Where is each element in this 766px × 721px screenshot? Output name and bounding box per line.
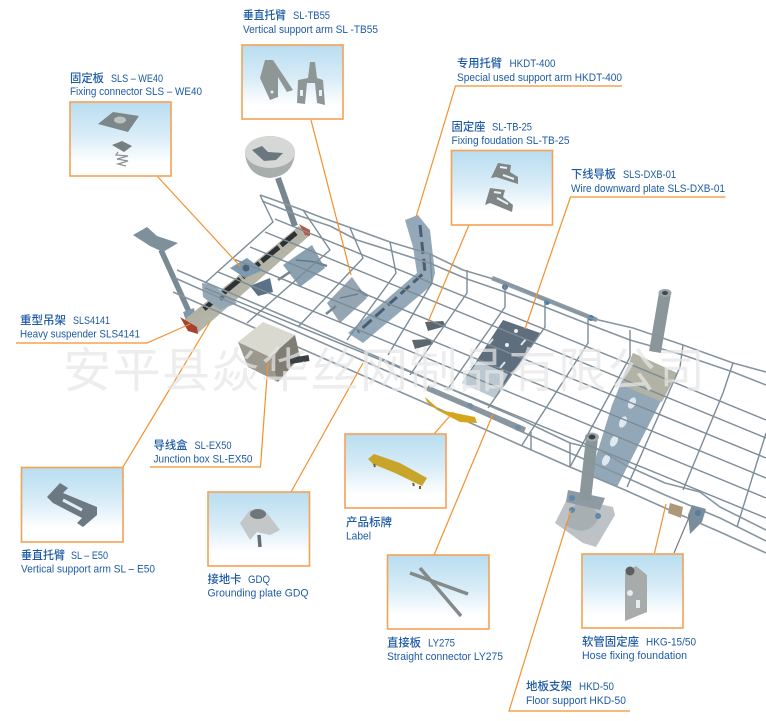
label: vertical support arm TB55: Vertical support arm SL -TB55 xyxy=(243,24,378,36)
label: straight connector: 直接板 xyxy=(387,636,421,650)
label: vertical support arm E50: Vertical support arm SL – E50 xyxy=(21,564,155,576)
leader line: label xyxy=(434,412,454,434)
leader line: floor support xyxy=(509,510,630,711)
label: hose fixing foundation: HKG-15/50 xyxy=(646,636,696,648)
label: floor support xyxy=(526,679,626,707)
label: vertical support arm E50: SL – E50 xyxy=(71,550,108,562)
icon: junction box xyxy=(238,322,309,382)
icon: crossed connector strips xyxy=(410,568,468,616)
label: vertical support arm TB55 xyxy=(243,8,378,36)
leader line: vertical support arm E50 xyxy=(123,322,210,467)
label: heavy suspender: 重型吊架 xyxy=(20,313,66,327)
panel: vertical support arm TB55 xyxy=(242,45,343,119)
icon: front rail joint strip xyxy=(427,388,525,431)
leader line: special support arm xyxy=(416,86,622,217)
label: grounding plate: GDQ xyxy=(248,574,270,586)
label: junction box xyxy=(154,438,252,466)
icon: slotted plate xyxy=(47,483,97,527)
leader line: junction box xyxy=(150,362,268,467)
label: vertical support arm E50: 垂直托臂 xyxy=(21,548,65,562)
label: product label: 产品标牌 xyxy=(346,515,392,529)
label: vertical support arm TB55: 垂直托臂 xyxy=(243,8,286,22)
icon: hose fixing bracket xyxy=(625,566,647,621)
label: vertical support arm TB55: SL-TB55 xyxy=(293,10,330,22)
panel: fixing foundation xyxy=(452,150,552,225)
label: straight connector xyxy=(387,636,503,663)
icon: ceiling bowl mount xyxy=(245,136,295,178)
icon: two bracket arms xyxy=(260,60,325,105)
icon: plate and spring nut xyxy=(98,112,139,166)
icon: clamp on channel xyxy=(202,283,237,310)
cable tray assembly xyxy=(133,136,766,553)
icon: back rail joint strip xyxy=(492,278,597,321)
icon: fixing foundation pieces xyxy=(412,321,446,349)
label: grounding plate: Grounding plate GDQ xyxy=(208,588,309,600)
label: hose fixing foundation: 软管固定座 xyxy=(582,634,639,648)
icon: right hanger rod xyxy=(278,178,295,226)
leader line: fixing connector xyxy=(157,176,240,266)
label: junction box: 导线盒 xyxy=(154,438,188,452)
label: fixing connector xyxy=(70,71,202,98)
icon: special support arm xyxy=(348,215,435,343)
label: wire downward plate: SLS-DXB-01 xyxy=(623,169,676,181)
label: fixing foundation: SL-TB-25 xyxy=(492,122,532,134)
label: product label xyxy=(346,515,392,542)
label: floor support: 地板支架 xyxy=(526,679,572,693)
label: fixing foundation xyxy=(452,120,570,147)
label: grounding plate: 接地卡 xyxy=(208,572,242,586)
label: special support arm: Special used support arm HKDT-400 xyxy=(457,72,622,84)
label: fixing connector: SLS – WE40 xyxy=(111,73,163,85)
panel: hose fixing foundation xyxy=(582,554,683,628)
label: heavy suspender xyxy=(20,313,140,340)
icon: grounding clamp xyxy=(240,509,280,547)
leader line: grounding plate xyxy=(291,363,363,492)
wire mesh xyxy=(173,195,766,553)
label: straight connector: Straight connector LY275 xyxy=(387,651,503,663)
label: vertical support arm E50 xyxy=(21,548,155,576)
leader line: straight connector xyxy=(434,414,493,555)
label: fixing connector: Fixing connector SLS – WE40 xyxy=(70,86,202,98)
icon: left hanger rod and bracket xyxy=(133,227,196,324)
icon: channel on floor support xyxy=(590,353,677,487)
icon: vertical bracket on tray floor xyxy=(278,245,327,287)
label: heavy suspender: SLS4141 xyxy=(73,315,110,327)
icon: heavy suspender channel xyxy=(180,224,310,334)
label: floor support: Floor support HKD-50 xyxy=(526,695,626,707)
label: junction box: SL-EX50 xyxy=(194,440,232,452)
panel: fixing connector xyxy=(70,102,171,176)
icon: box under channel xyxy=(250,278,273,296)
label: junction box: Junction box SL-EX50 xyxy=(154,454,252,466)
icon: vertical support bracket xyxy=(326,277,368,323)
panel: vertical support arm E50 xyxy=(22,468,123,542)
label: special support arm: HKDT-400 xyxy=(510,58,556,70)
panel: straight connector xyxy=(388,555,489,629)
watermark: 安平县焱华丝网制品有限公司 xyxy=(63,331,705,401)
panel: label xyxy=(345,434,446,508)
icon: floor support base xyxy=(555,490,615,547)
label: product label: Label xyxy=(346,530,371,542)
panel: grounding plate xyxy=(208,492,310,566)
leader line: vertical support arm TB55 xyxy=(311,120,351,275)
label: floor support: HKD-50 xyxy=(579,681,614,693)
label: fixing foundation: 固定座 xyxy=(452,120,486,134)
label: heavy suspender: Heavy suspender SLS4141 xyxy=(20,328,140,340)
leader line: heavy suspender xyxy=(16,324,190,343)
icon: yellow label on tray xyxy=(425,397,477,423)
label: special support arm: 专用托臂 xyxy=(457,56,502,70)
icon: two L brackets xyxy=(485,163,518,212)
label: fixing connector: 固定板 xyxy=(70,71,104,85)
leader line: wire downward plate xyxy=(525,197,726,329)
label: grounding plate xyxy=(208,572,309,600)
label: wire downward plate: Wire downward plate SLS-DXB-01 xyxy=(571,183,725,195)
icon: upper rod xyxy=(655,289,672,352)
label: special support arm xyxy=(457,56,622,84)
leader line: hose fixing foundation xyxy=(654,504,666,553)
icon: yellow label plate xyxy=(368,454,427,489)
icon: hose fixing on tray xyxy=(668,503,706,534)
icon: floor support rod xyxy=(585,432,599,500)
label: wire downward plate: 下线导板 xyxy=(571,167,616,181)
icon: fixing connector on channel xyxy=(230,258,263,278)
label: hose fixing foundation xyxy=(582,634,696,662)
label: wire downward plate xyxy=(571,167,725,195)
icon: wire downward plate xyxy=(462,320,540,398)
leader line: fixing foundation xyxy=(428,225,469,322)
label: hose fixing foundation: Hose fixing foundation xyxy=(582,650,687,662)
hose fixing wire xyxy=(674,515,690,553)
label: straight connector: LY275 xyxy=(428,638,455,650)
label: fixing foundation: Fixing foudation SL-TB-25 xyxy=(452,135,570,147)
